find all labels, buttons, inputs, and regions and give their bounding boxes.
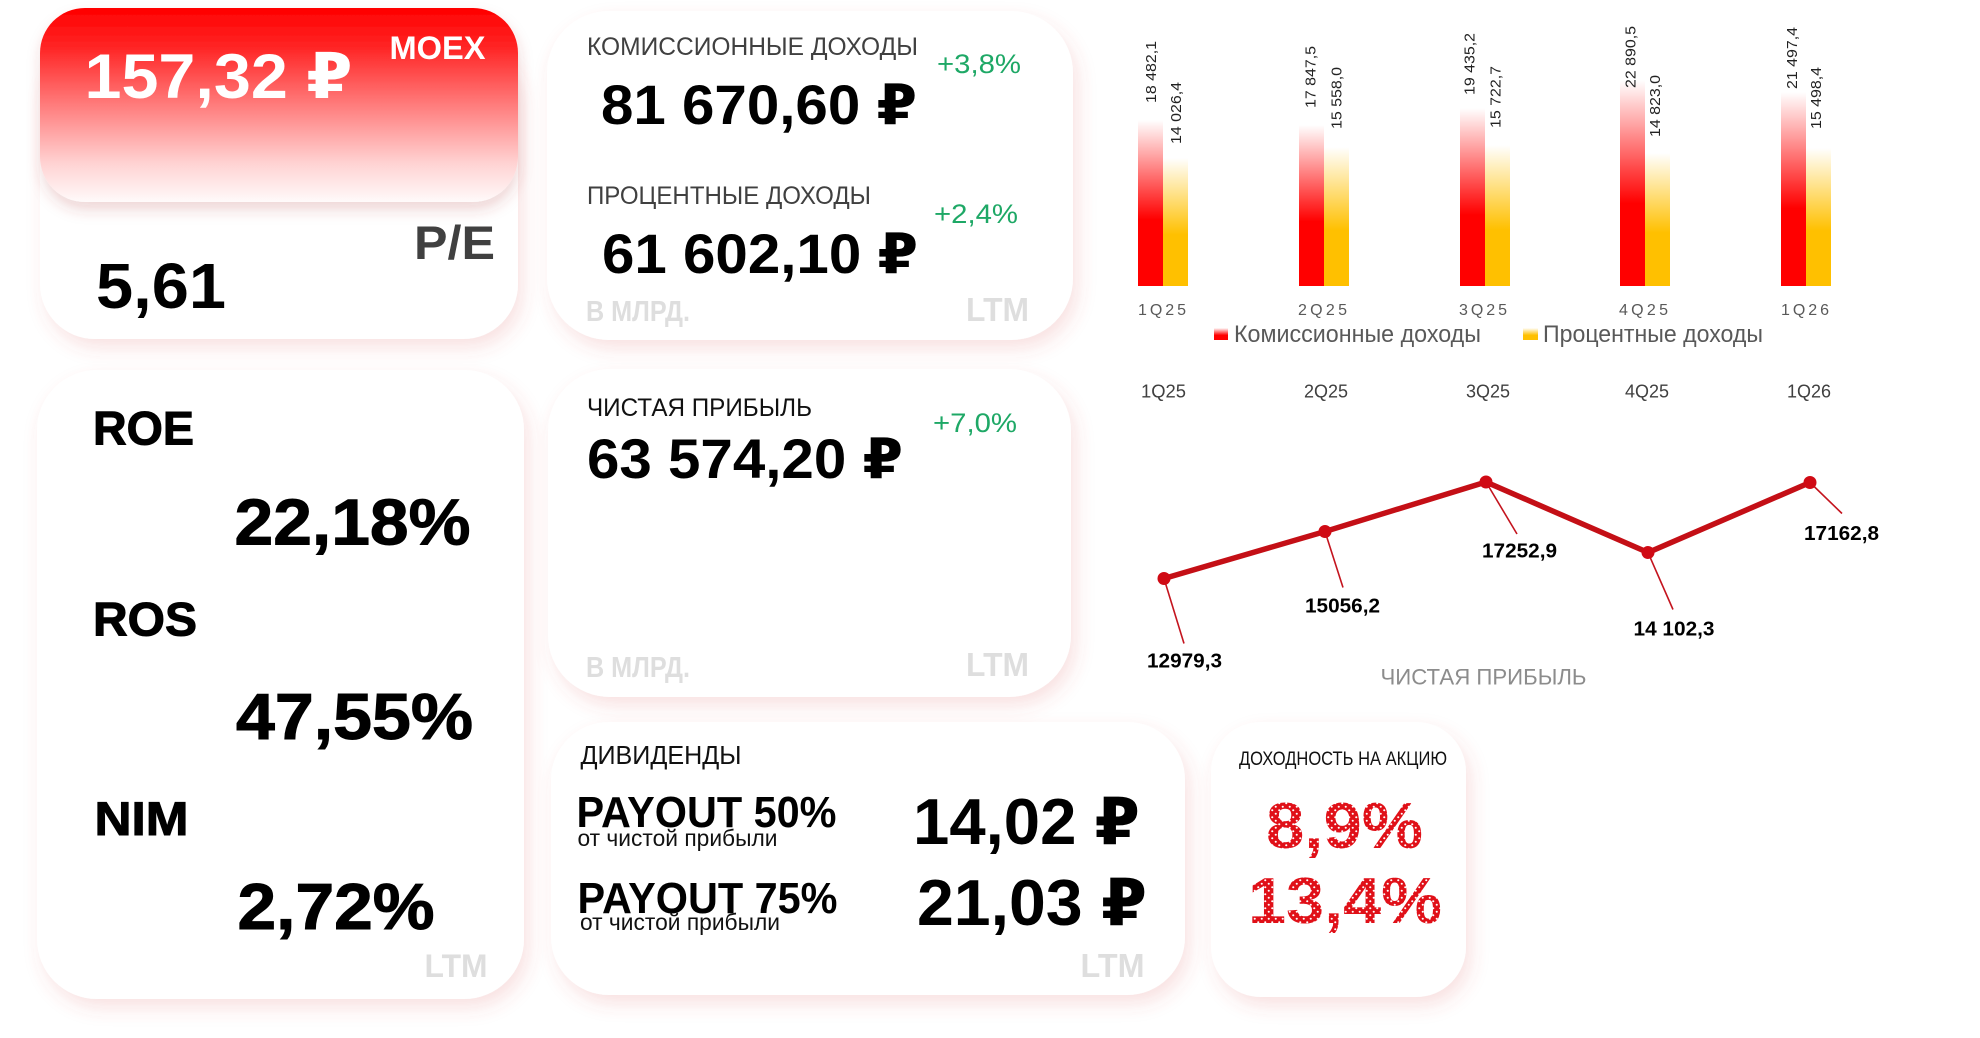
point labels: 17252,9 (1482, 540, 1557, 562)
line chart: net profit by quarter (1141, 382, 1879, 690)
legend: commission income: Комиссионные доходы (1234, 321, 1481, 348)
bar value labels: 15 558,0 (1328, 67, 1346, 129)
heading: dividends: ДИВИДЕНДЫ (580, 740, 742, 770)
heading: yield per share: ДОХОДНОСТЬ НА АКЦИЮ (1239, 749, 1447, 770)
bar value labels: 18 482,1 (1143, 41, 1160, 103)
panel: dividend yield card (1211, 722, 1466, 997)
LTM note: LTM (966, 291, 1029, 328)
value: net profit: 63 574,20 ₽ (587, 427, 903, 490)
label: ROE: ROE (93, 402, 194, 454)
label: NIM: NIM (94, 792, 188, 845)
note: from net profit: от чистой прибыли (580, 909, 780, 935)
change: commission income: +3,8% (937, 49, 1021, 79)
line chart title: ЧИСТАЯ ПРИБЫЛЬ (1380, 664, 1586, 690)
value: dividend at 50%: 14,02 ₽ (913, 785, 1140, 858)
LTM note: LTM (1080, 947, 1144, 984)
panel: revenue card (547, 11, 1073, 340)
line chart axis labels (1141, 382, 1831, 402)
value: yield at 75%: 13,4% (1248, 864, 1442, 937)
bar chart: income by quarter (1138, 26, 1831, 348)
value: P/E: 5,61 (96, 250, 226, 322)
value: yield at 50%: 8,9% (1266, 789, 1423, 862)
value: share price: 157,32 ₽ (84, 42, 352, 112)
value: commission income: 81 670,60 ₽ (601, 73, 917, 136)
label: payout 50%: PAYOUT 50% (576, 788, 836, 837)
bar value labels: 22 890,5 (1622, 26, 1640, 88)
label: ROS: ROS (93, 592, 197, 646)
bars: 3Q25 (1460, 108, 1510, 286)
value: NIM: 2,72% (238, 870, 434, 943)
heading: interest income: ПРОЦЕНТНЫЕ ДОХОДЫ (587, 182, 871, 210)
bar value labels: 17 847,5 (1302, 46, 1320, 108)
heading: commission income: КОМИССИОННЫЕ ДОХОДЫ (587, 33, 918, 61)
bars: 4Q25 (1620, 80, 1670, 286)
label: P/E: P/E (414, 216, 495, 269)
label: payout 75%: PAYOUT 75% (578, 874, 838, 923)
point labels: 12979,3 (1147, 650, 1222, 672)
bar value labels: 21 497,4 (1784, 27, 1801, 89)
bar chart axis labels (1138, 302, 1829, 319)
panel: profitability ratios (37, 370, 524, 999)
bar chart axis labels: 1Q25 (1138, 302, 1186, 319)
value: dividend at 75%: 21,03 ₽ (917, 866, 1147, 939)
bar value labels: 15 722,7 (1488, 66, 1504, 128)
bars: 2Q25 (1299, 125, 1349, 286)
LTM note: LTM (966, 646, 1029, 683)
unit note: В МЛРД. (586, 652, 690, 684)
bar chart axis labels: 4Q25 (1619, 302, 1668, 319)
value: ROE: 22,18% (234, 486, 470, 558)
legend: interest income: Процентные доходы (1543, 321, 1763, 348)
line chart axis labels: 1Q25 (1141, 382, 1186, 402)
bar value labels: 14 026,4 (1168, 82, 1185, 144)
panel: P/E card (40, 40, 518, 339)
point labels: 14 102,3 (1634, 618, 1714, 640)
point labels: 17162,8 (1804, 523, 1879, 545)
panel: dividends card (551, 722, 1185, 995)
bar value labels: 14 823,0 (1647, 75, 1664, 137)
bar chart axis labels: 3Q25 (1459, 302, 1507, 319)
label: MOEX: MOEX (390, 30, 486, 66)
bar value labels: 19 435,2 (1462, 33, 1478, 95)
note: from net profit: от чистой прибыли (578, 825, 778, 851)
change: interest income: +2,4% (934, 199, 1018, 229)
line chart axis labels: 3Q25 (1466, 382, 1510, 402)
net profit line (1164, 482, 1810, 578)
heading: net profit: ЧИСТАЯ ПРИБЫЛЬ (587, 394, 812, 422)
LTM note: LTM (424, 948, 488, 984)
line chart axis labels: 1Q26 (1787, 382, 1831, 402)
bar chart axis labels: 1Q26 (1781, 302, 1829, 319)
leader lines (1164, 482, 1842, 644)
bars: 1Q26 (1781, 92, 1831, 286)
bar chart axis labels: 2Q25 (1298, 302, 1347, 319)
panel: price card (40, 8, 518, 202)
value: ROS: 47,55% (236, 680, 473, 753)
bars: 1Q25 (1138, 120, 1188, 286)
bar value labels (1143, 26, 1825, 144)
line chart axis labels: 2Q25 (1304, 382, 1348, 402)
point labels: 15056,2 (1305, 596, 1380, 618)
unit note: В МЛРД. (586, 296, 690, 328)
line markers (1158, 476, 1816, 585)
bar value labels: 15 498,4 (1808, 67, 1825, 129)
value: interest income: 61 602,10 ₽ (602, 222, 918, 285)
line chart axis labels: 4Q25 (1625, 382, 1669, 402)
panel: net profit card (548, 369, 1071, 697)
point labels (1147, 523, 1879, 672)
change: net profit: +7,0% (933, 408, 1017, 438)
